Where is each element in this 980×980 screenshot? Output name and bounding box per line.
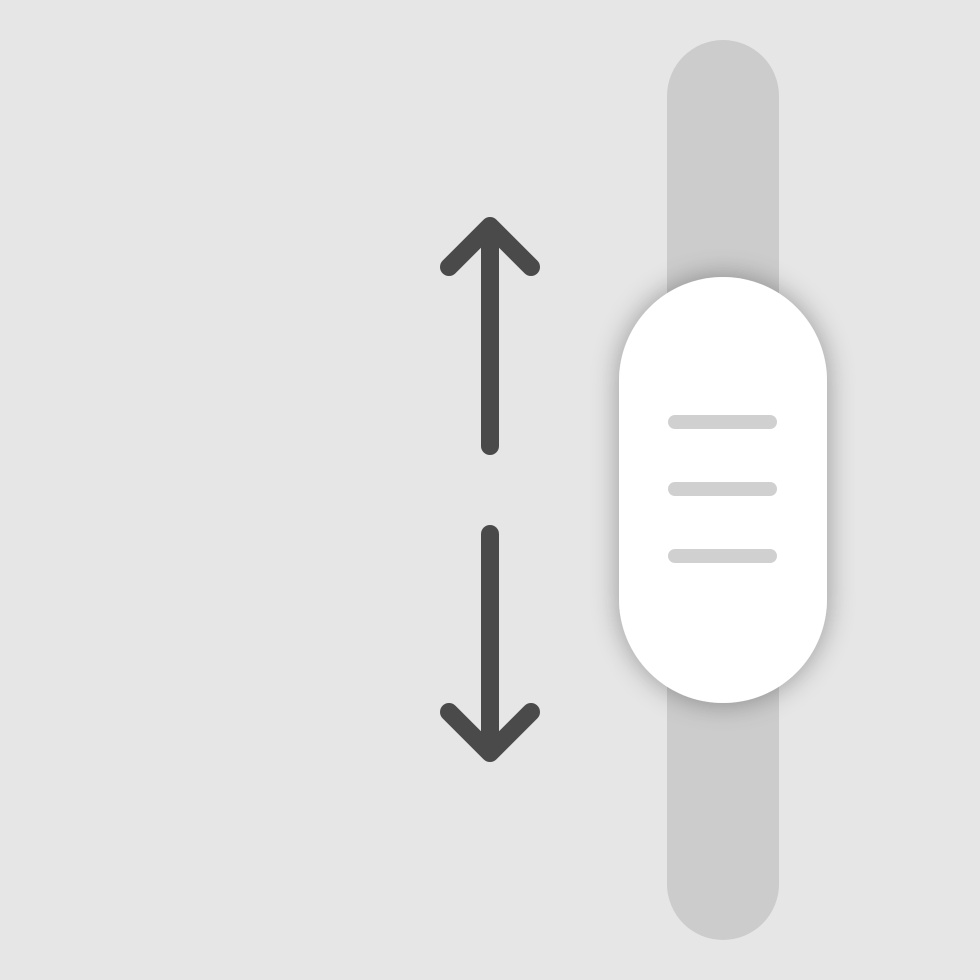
arrow: up (449, 226, 531, 446)
slider track (667, 40, 779, 940)
arrow: down (449, 534, 531, 753)
thumb grip lines (675, 422, 770, 556)
slider thumb (619, 277, 827, 703)
